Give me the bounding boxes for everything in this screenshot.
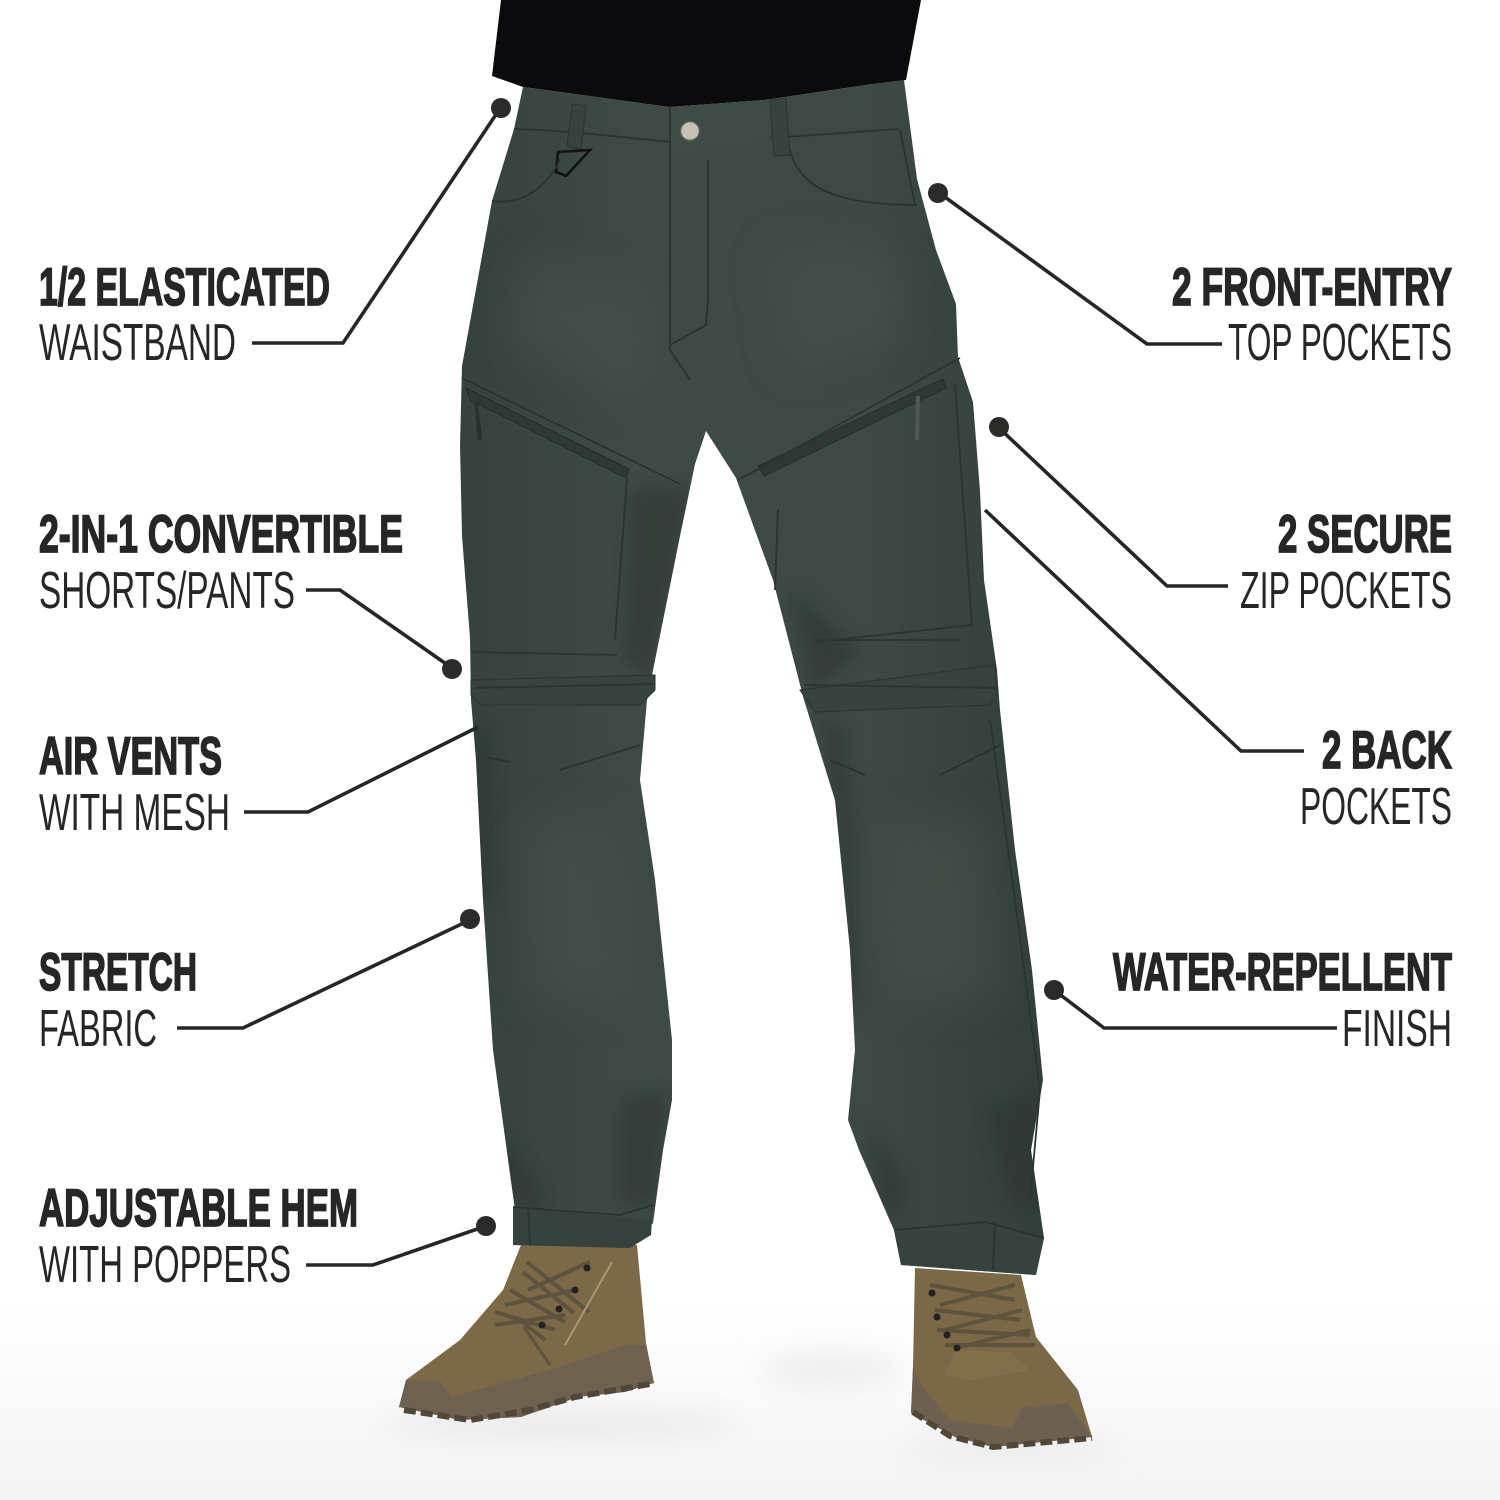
callout: stretch fabric [39, 909, 480, 1058]
callout: air vents with mesh [39, 727, 478, 842]
callout: air vents with mesh: AIR VENTS [39, 727, 222, 786]
callout: 1/2 elasticated waistband: WAISTBAND [39, 314, 236, 372]
fly [670, 107, 708, 380]
callout: 2-in-1 convertible shorts/pants: 2-IN-1 CONVERTIBLE [39, 505, 403, 564]
button [680, 122, 700, 140]
callout: stretch fabric: FABRIC [39, 1000, 157, 1058]
top pockets [492, 150, 917, 205]
right boot [911, 1268, 1092, 1447]
shading folds [473, 492, 1040, 1220]
cuffs [513, 1207, 652, 1248]
callout: adjustable hem with poppers: WITH POPPERS [39, 1236, 291, 1294]
callout: adjustable hem with poppers [39, 1179, 496, 1294]
callout: 2 front-entry top pockets [928, 183, 1452, 372]
callout: 2 secure zip pockets [989, 417, 1452, 620]
photo: person wearing pants and boots [399, 0, 1092, 1447]
pants [460, 80, 1044, 1275]
carabiner [556, 150, 590, 176]
callout: stretch fabric: STRETCH [39, 943, 197, 1002]
callout: air vents with mesh: WITH MESH [39, 784, 230, 842]
callout: 1/2 elasticated waistband [39, 98, 511, 372]
outer leg seam [990, 720, 1040, 1200]
callout: 1/2 elasticated waistband: 1/2 ELASTICATED [39, 258, 330, 317]
callout: adjustable hem with poppers: ADJUSTABLE HEM [39, 1179, 358, 1238]
shirt [492, 0, 921, 107]
zip pulls [476, 402, 480, 440]
callout: 2-in-1 convertible shorts/pants: SHORTS/PANTS [39, 562, 295, 620]
callout: water-repellent finish [1044, 943, 1452, 1058]
right zip pocket [758, 379, 946, 476]
callout: 2 back pockets [985, 510, 1452, 836]
left zip pocket [466, 388, 629, 478]
left boot [399, 1245, 654, 1420]
callout: 2-in-1 convertible shorts/pants [39, 505, 462, 679]
waistband and belt loops [514, 129, 899, 142]
knee vents [485, 745, 1000, 775]
conversion zip band [471, 675, 655, 705]
